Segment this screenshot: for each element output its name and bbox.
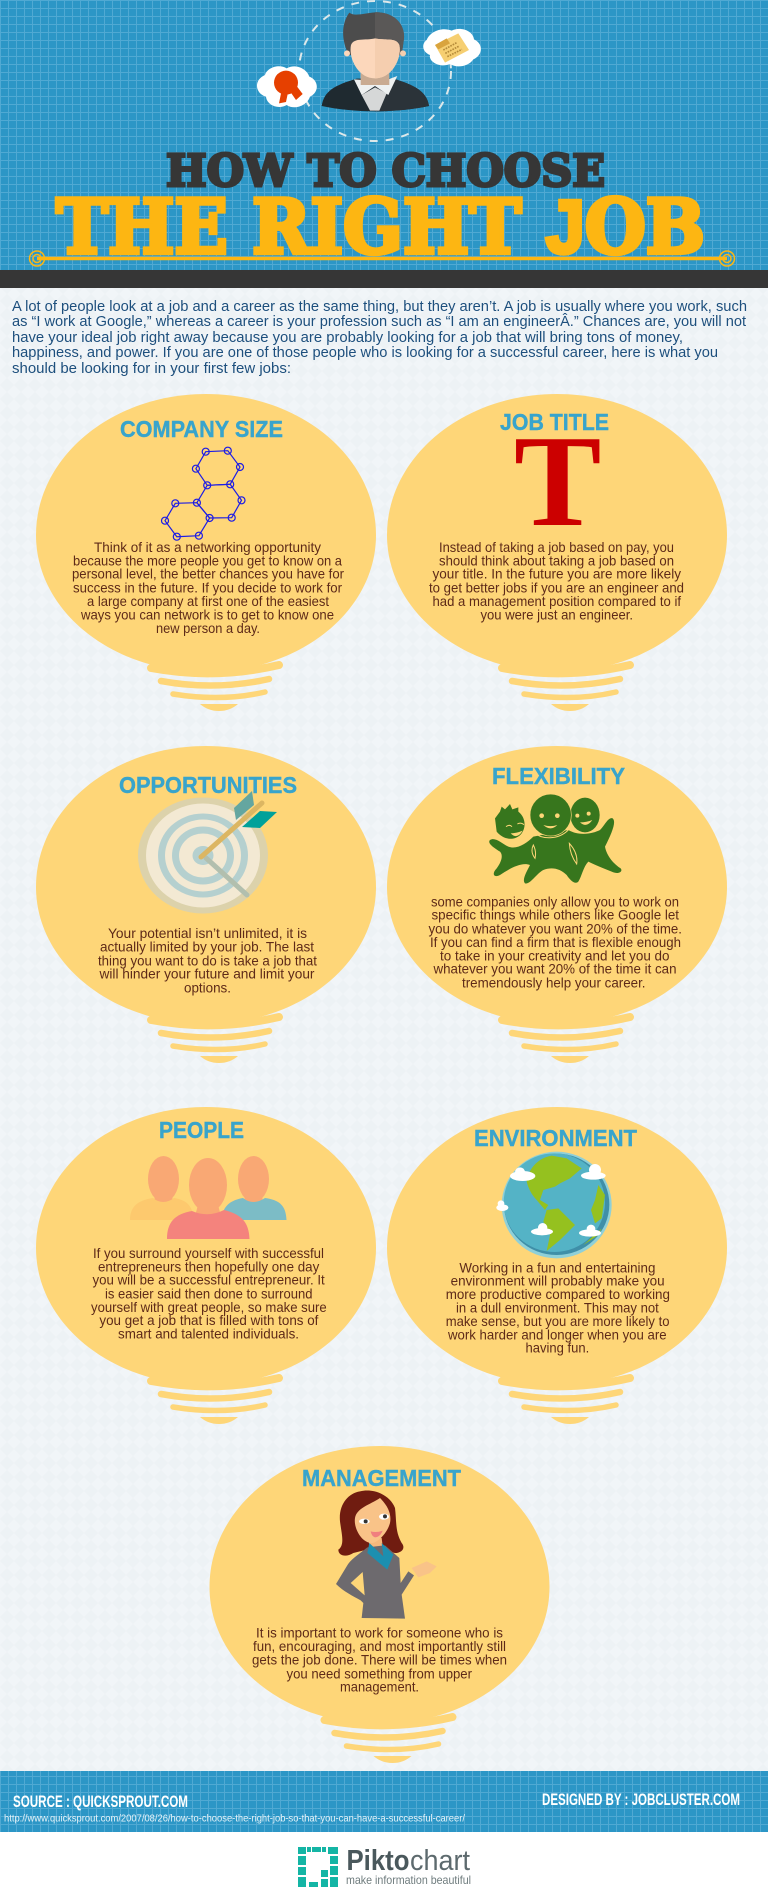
icon: document cloud: [423, 29, 481, 66]
intro text: happiness, and power. If you are one of those people who is looking for a successful career, here is what you: [12, 344, 718, 361]
body text: you need something from upper: [286, 1665, 472, 1681]
body text: actually limited by your job. The last: [100, 939, 314, 955]
icon: target with arrow: [138, 791, 277, 914]
body text: [446, 1259, 670, 1356]
body text: If you can find a firm that is flexible enough: [430, 934, 681, 950]
icon: three happy people: [489, 794, 621, 883]
bulb shape: [210, 1446, 550, 1763]
intro text: have your ideal job right away because you are probably looking for a job that will bring tons of money,: [12, 329, 683, 346]
icon: three people silhouettes: [130, 1156, 286, 1239]
body text: you get a job that is filled with tons of: [99, 1312, 318, 1328]
intro text: as “I work at Google,” whereas a career is your profession such as “I am an engineerÂ.” Chances are, you will not: [12, 313, 747, 330]
panel: management: [210, 1446, 550, 1763]
logo wordmark: Pikto: [346, 1845, 410, 1877]
heading: opportunities: OPPORTUNITIES: [119, 772, 297, 798]
body text: new person a day.: [156, 620, 260, 636]
body text: will hinder your future and limit your: [99, 966, 315, 982]
title: [56, 146, 705, 271]
intro text: A lot of people look at a job and a career as the same thing, but they aren’t. A job is usually where you work, such: [12, 298, 747, 315]
body text: some companies only allow you to work on: [431, 894, 679, 910]
body text: is easier said then done to surround: [105, 1285, 312, 1301]
body text: more productive compared to working: [446, 1286, 670, 1302]
body text: entrepreneurs then hopefully one day: [98, 1258, 319, 1274]
body text: make sense, but you are more likely to: [446, 1313, 670, 1329]
body text: smart and talented individuals.: [118, 1326, 299, 1342]
footer band: [0, 1771, 768, 1832]
bulb shape: [36, 746, 376, 1063]
source credit: SOURCE : QUICKSPROUT.COM: [13, 1792, 188, 1811]
heading: people: PEOPLE: [159, 1117, 244, 1143]
icon: businessman: [322, 12, 429, 111]
panel: opportunities: [36, 746, 376, 1063]
intro text: should be looking for in your first few jobs:: [12, 360, 291, 377]
heading: company size: COMPANY SIZE: [120, 416, 283, 442]
body text: gets the job done. There will be times when: [252, 1652, 507, 1668]
body text: personal level, the better chances you have for: [72, 566, 344, 582]
body text: should think about taking a job based on: [439, 552, 674, 568]
body text: yourself with great people, so make sure: [91, 1299, 327, 1315]
panel: people: [36, 1107, 376, 1424]
logo mark: [298, 1847, 338, 1887]
panel: job title: [387, 394, 727, 711]
bulb shape: [387, 394, 727, 711]
heading: environment: ENVIRONMENT: [474, 1125, 638, 1151]
gold underline with end circles: [30, 251, 734, 266]
body text: thing you want to do is take a job that: [98, 952, 317, 968]
header banner: [0, 0, 768, 288]
body text: Think of it as a networking opportunity: [94, 539, 321, 555]
title line 2: THE RIGHT JOB: [56, 183, 705, 271]
icon: award cloud: [257, 66, 317, 107]
bulb shape: [387, 1107, 727, 1424]
bulb shape: [36, 1107, 376, 1424]
body text: you will be a successful entrepreneur. It: [92, 1272, 325, 1288]
body text: options.: [184, 980, 231, 996]
body text: If you surround yourself with successful: [93, 1245, 324, 1261]
body text: [252, 1625, 507, 1695]
panel: environment: [387, 1107, 727, 1424]
body text: [428, 894, 682, 990]
body text: Instead of taking a job based on pay, you: [439, 539, 674, 555]
bulb shape: [387, 746, 727, 1063]
heading: job title: JOB TITLE: [500, 409, 609, 435]
body text: environment will probably make you: [451, 1273, 665, 1289]
logo wordmark light: chart: [410, 1845, 470, 1877]
body text: a large company at first one of the easiest: [87, 593, 329, 609]
dashed orbit circle: [299, 1, 451, 141]
body text: ways you can network is to get to know one: [80, 606, 334, 622]
body text: had a management position compared to if: [432, 593, 681, 609]
white footer: [0, 1832, 768, 1903]
body text: fun, encouraging, and most importantly still: [253, 1638, 506, 1654]
body text: [429, 539, 684, 622]
body text: in a dull environment. This may not: [456, 1300, 659, 1316]
body text: to take in your creativity and let you do: [440, 948, 670, 964]
bulb shape: [36, 394, 376, 711]
heading: flexibility: FLEXIBILITY: [492, 763, 625, 789]
body text: having fun.: [526, 1340, 589, 1356]
heading: management: MANAGEMENT: [302, 1465, 462, 1491]
logo tagline: make information beautiful: [346, 1873, 471, 1887]
piktochart logo: [298, 1845, 471, 1887]
body text: Working in a fun and entertaining: [459, 1259, 655, 1275]
body text: management.: [340, 1679, 419, 1695]
panel: company size: [36, 394, 376, 711]
body text: [91, 1245, 327, 1342]
icon: hexagon network: [162, 447, 245, 540]
source url: http://www.quicksprout.com/2007/08/26/how-to-choose-the-right-job-so-that-you-can-have-a-successful-career/: [4, 1812, 465, 1824]
body text: It is important to work for someone who is: [256, 1625, 503, 1641]
body text: [98, 925, 317, 996]
body text: Your potential isn’t unlimited, it is: [108, 925, 307, 941]
intro text: [12, 298, 747, 377]
body text: your title. In the future you are more likely: [432, 566, 681, 582]
body text: specific things while others like Google let: [432, 907, 679, 923]
body text: whatever you want 20% of the time it can: [433, 961, 676, 977]
icon: businesswoman: [336, 1490, 437, 1619]
body text: you were just an engineer.: [480, 606, 633, 622]
body text: work harder and longer when you are: [447, 1326, 667, 1342]
panel: flexibility: [387, 746, 727, 1063]
title line 1: HOW TO CHOOSE: [166, 146, 605, 197]
body text: [72, 539, 344, 636]
body text: you do whatever you want 20% of the time.: [428, 920, 682, 936]
body text: tremendously help your career.: [462, 974, 646, 990]
body text: because the more people you get to know on a: [73, 552, 342, 568]
icon: letter T: T: [514, 409, 601, 554]
body text: success in the future. If you decide to work for: [73, 579, 342, 595]
body text: to get better jobs if you are an engineer and: [429, 579, 684, 595]
icon: globe with clouds: [496, 1152, 612, 1258]
